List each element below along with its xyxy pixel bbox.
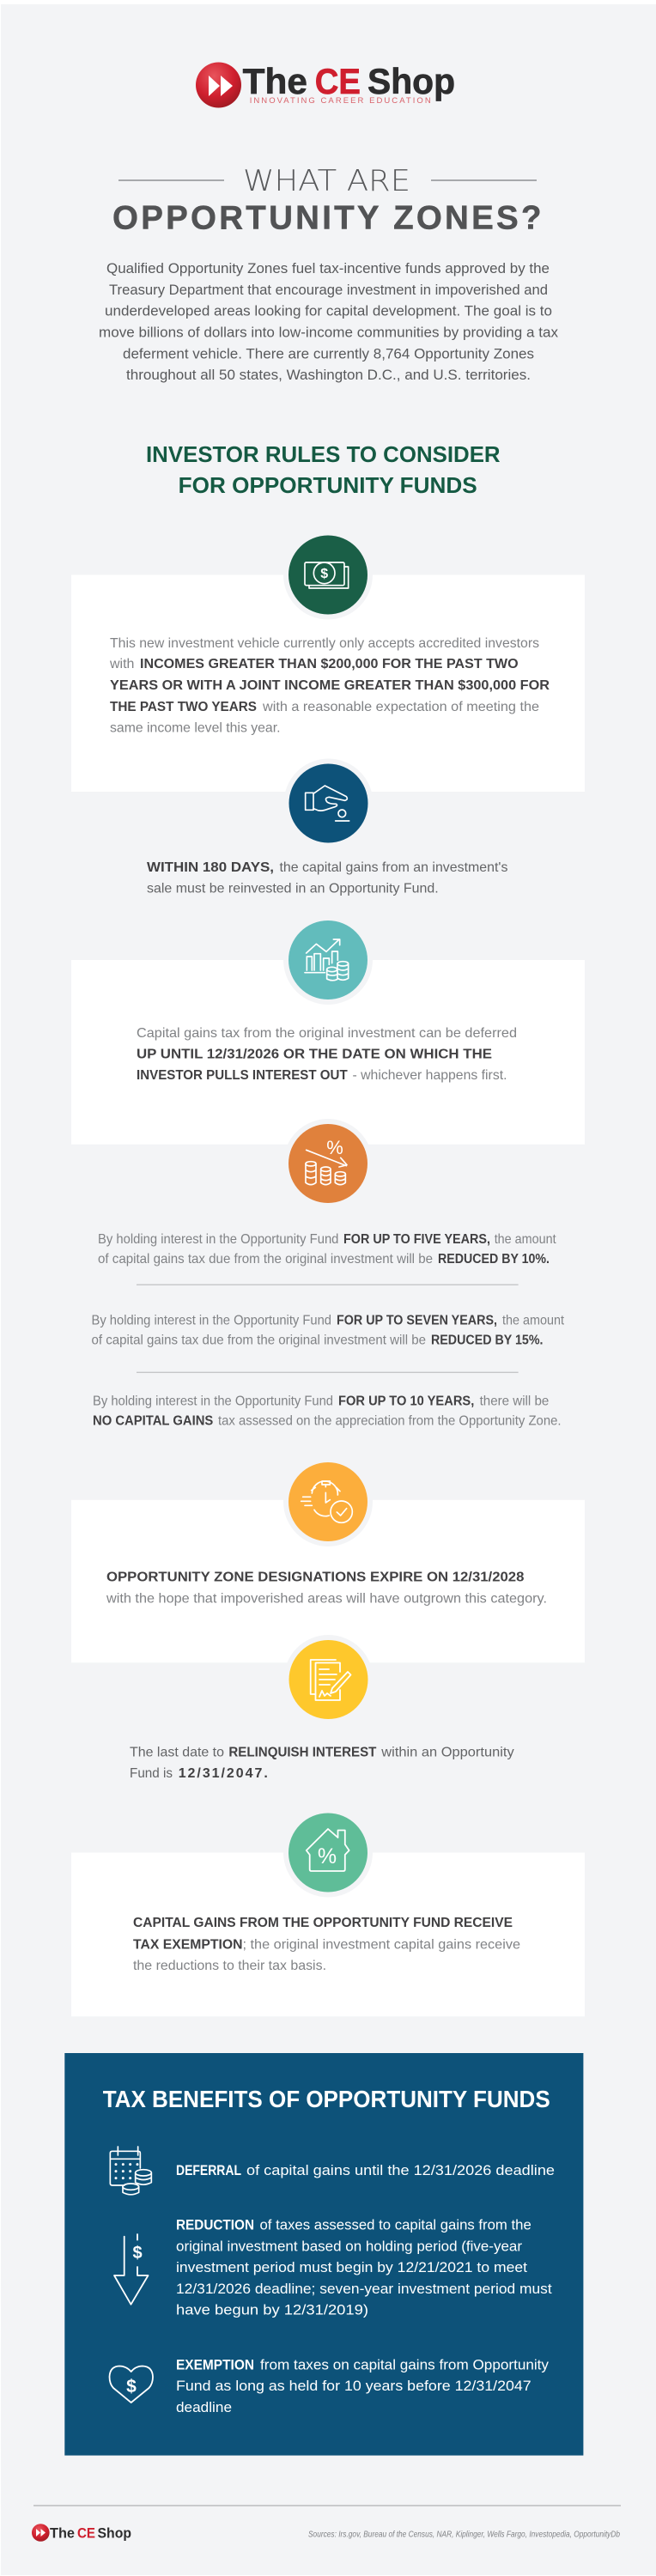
heading: tax benefits: TAX BENEFITS OF OPPORTUNITY FUNDS [103,2086,550,2112]
icon: heart with dollar: $ [126,2377,137,2397]
text: capital gains deferral [137,1026,517,1083]
text: five-year holding: the amount [495,1232,556,1247]
text: zone designations expire: OPPORTUNITY ZONE DESIGNATIONS EXPIRE ON 12/31/2028 [106,1570,525,1584]
text: capital gains deferral: UP UNTIL 12/31/2026 OR THE DATE ON WHICH THE [137,1047,492,1061]
icon: chart and coins [283,915,373,1005]
text: tax exemption: the reductions to their tax basis. [133,1959,326,1973]
text: accredited investors: with a reasonable expectation of meeting the [262,700,539,714]
text: within 180 days [147,860,507,896]
icon: falling percent and coins: % [326,1137,343,1158]
text: accredited investors: YEARS OR WITH A JOINT INCOME GREATER THAN $300,000 FOR [110,678,550,693]
footer logo [32,2524,131,2542]
text: reduction [176,2217,552,2318]
text: ten-year holding: tax assessed on the appreciation from the Opportunity Zone. [218,1414,562,1429]
text: relinquish interest: within an Opportunity [380,1746,514,1760]
text: deferral: of capital gains until the 12/31/2026 deadline [246,2162,555,2178]
icon: down arrow with dollar: $ [132,2244,143,2263]
text: five-year holding: By holding interest in the Opportunity Fund [98,1232,338,1247]
text: capital gains deferral: - whichever happens first. [352,1068,507,1083]
text: zone designations expire [106,1570,547,1606]
text: accredited investors: same income level this year. [110,721,280,735]
intro text [99,261,559,383]
text: ten-year holding: FOR UP TO 10 YEARS, [338,1394,474,1409]
text: exemption: EXEMPTION [176,2357,254,2373]
icon: money [283,531,373,620]
text: accredited investors: THE PAST TWO YEARS [110,700,257,714]
text: accredited investors: INCOMES GREATER THAN $200,000 FOR THE PAST TWO [140,657,519,671]
icon: signed document [283,1635,373,1724]
intro text: move billions of dollars into low-income communities by providing a tax [99,325,559,341]
text: relinquish interest [130,1746,514,1781]
text: within 180 days: WITHIN 180 DAYS, [147,860,274,875]
panel: capital gains deferral [71,960,585,1145]
panel: zone designations expire [71,1500,585,1662]
text: ten-year holding: By holding interest in the Opportunity Fund [93,1394,333,1409]
text: ten-year holding [93,1394,562,1429]
text: five-year holding: REDUCED BY 10%. [438,1252,550,1267]
logo: The CE Shop: CE [315,61,361,101]
text: capital gains deferral: Capital gains tax from the original investment can be deferred [137,1026,517,1041]
text: relinquish interest: Fund is [130,1766,173,1781]
text: five-year holding [98,1232,556,1267]
text: accredited investors: with [109,657,134,671]
text: ten-year holding: there will be [480,1394,549,1409]
intro text: Qualified Opportunity Zones fuel tax-incentive funds approved by the [106,261,550,276]
heading: investor rules: INVESTOR RULES TO CONSIDER [146,441,501,467]
intro text: Treasury Department that encourage investment in impoverished and [109,283,548,298]
icon: house with percent [283,1808,373,1898]
text: reduction: of taxes assessed to capital gains from the [259,2217,531,2233]
text: accredited investors [109,636,550,735]
text: zone designations expire: with the hope that impoverished areas will have outgrown this category. [106,1592,547,1606]
text: ten-year holding: NO CAPITAL GAINS [93,1414,214,1429]
text: relinquish interest: RELINQUISH INTEREST [228,1746,377,1760]
text: five-year holding: of capital gains tax due from the original investment will be [98,1252,433,1267]
text: seven-year holding [91,1314,564,1348]
panel: tax exemption [71,1853,585,2016]
text: reduction: REDUCTION [176,2217,254,2233]
text: reduction: 12/31/2026 deadline; seven-year investment period must [176,2281,552,2297]
icon: hand and coin [283,759,373,848]
text: reduction: investment period must begin by 12/21/2021 to meet [176,2259,527,2275]
text: exemption: Fund as long as held for 10 years before 12/31/2047 [176,2378,531,2394]
logo: The CE Shop [196,61,455,108]
text: five-year holding: FOR UP TO FIVE YEARS, [343,1232,490,1247]
panel: tax benefits [64,2053,583,2456]
panel: accredited investors [71,575,585,792]
title [112,164,541,237]
text: relinquish interest: The last date to [130,1746,224,1760]
text: seven-year holding: of capital gains tax due from the original investment will be [91,1333,426,1348]
text: capital gains deferral: INVESTOR PULLS INTEREST OUT [137,1068,348,1083]
text: accredited investors: This new investment vehicle currently only accepts accredited investors [110,636,539,651]
text: exemption: from taxes on capital gains from Opportunity [260,2357,549,2373]
text: tax exemption [133,1916,520,1973]
icon: calendar and coins [110,2147,151,2195]
text: reduction: original investment based on holding period (five-year [176,2239,522,2255]
text: reduction: have begun by 12/31/2019) [176,2301,368,2318]
text: tax exemption: TAX EXEMPTION [133,1937,242,1952]
intro text: deferment vehicle. There are currently 8,764 Opportunity Zones [123,347,534,362]
intro text: underdeveloped areas looking for capital development. The goal is to [105,304,552,319]
text: seven-year holding: the amount [502,1314,564,1328]
text: tax exemption: CAPITAL GAINS FROM THE OPPORTUNITY FUND RECEIVE [133,1916,513,1930]
title: OPPORTUNITY ZONES? [112,199,541,237]
footer logo: Shop [98,2524,131,2542]
text: deferral: DEFERRAL [176,2162,241,2178]
footer logo: The [50,2524,75,2542]
intro text: throughout all 50 states, Washington D.C., and U.S. territories. [126,368,531,383]
logo: The CE Shop: Shop [367,61,455,101]
icon: money: $ [320,567,328,581]
icon: falling percent and coins [283,1119,373,1208]
logo: The CE Shop: The [243,61,307,101]
text: relinquish interest: 12/31/2047. [179,1766,268,1781]
title: WHAT ARE [243,164,410,198]
text: exemption: deadline [176,2399,232,2415]
heading: investor rules [146,441,501,498]
logo: The CE Shop: INNOVATING CAREER EDUCATION [250,96,431,106]
footer logo: CE [77,2524,95,2542]
icon: house with percent: % [318,1844,337,1868]
text: tax exemption: ; the original investment capital gains receive [242,1937,520,1952]
icon: stopwatch with check [283,1457,373,1546]
icon: down arrow with dollar [114,2234,148,2305]
text: seven-year holding: FOR UP TO SEVEN YEARS, [337,1314,497,1328]
text: within 180 days: the capital gains from an investment's [280,860,507,875]
text: within 180 days: sale must be reinvested in an Opportunity Fund. [147,881,439,896]
text: seven-year holding: REDUCED BY 15%. [431,1333,543,1348]
heading: investor rules: FOR OPPORTUNITY FUNDS [179,472,477,498]
icon: heart with dollar [110,2366,153,2403]
text: seven-year holding: By holding interest in the Opportunity Fund [91,1314,331,1328]
text: exemption [176,2357,549,2415]
